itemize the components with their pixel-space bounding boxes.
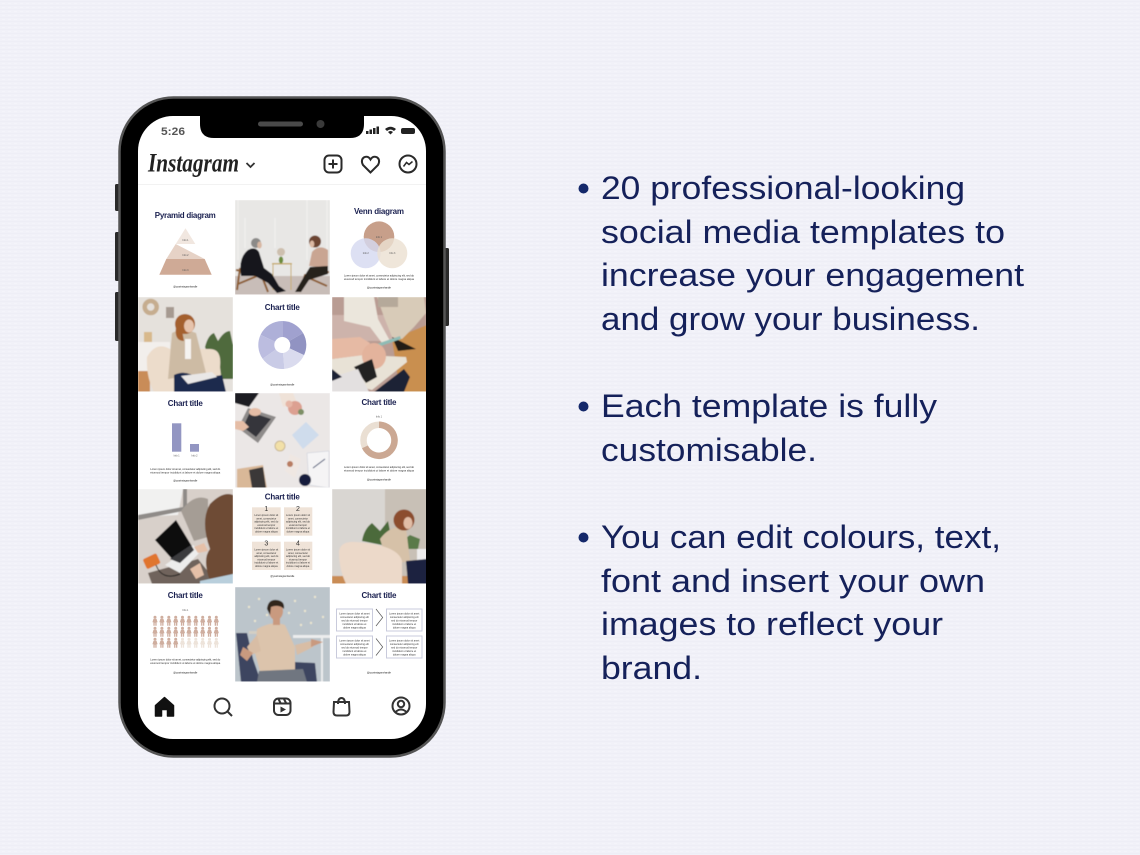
box 4: Lorem ipsum dolor sit (286, 548, 310, 552)
box 1: 1 (264, 506, 268, 513)
bullet 1: increase your engagement (601, 257, 1024, 293)
bullet 1: and grow your business. (601, 301, 980, 337)
handle: @yourinstagramhandle (367, 478, 392, 482)
icon: messenger (400, 156, 416, 172)
box 4: incididunt ut labore et (286, 562, 310, 565)
venn chart (351, 221, 407, 268)
flow row 2: sed do eiusmod tempor (391, 646, 417, 650)
body text: Lorem ipsum dolor sit amet, consectetur adipiscing elit, sed do (150, 658, 221, 662)
flow row 1: consectetur adipiscing elit (340, 616, 369, 619)
handle: @yourinstagramhandle (367, 286, 392, 290)
post: pyramid diagram (155, 211, 216, 288)
side buttons (115, 184, 449, 341)
body text (344, 274, 414, 281)
box 1 (252, 506, 281, 536)
bullet 1: social media templates to (601, 214, 1005, 250)
body text: eiusmod tempor incididunt ut labore et dolore magna aliqua (150, 470, 221, 474)
bullet list (578, 170, 1024, 686)
box 4: eiusmod tempor (289, 558, 307, 561)
label: Info 1 (182, 609, 189, 612)
photo: desk flat lay (235, 393, 330, 488)
post: four numbered boxes (252, 492, 312, 578)
box 1: Lorem ipsum dolor sit (254, 514, 279, 517)
box 3: amet, consectetur (256, 552, 276, 555)
box 3: adipiscing elit, sed do (254, 555, 279, 558)
photo: woman in armchair (332, 489, 427, 584)
flow row 1: incididunt ut labore et (392, 623, 416, 626)
body text: eiusmod tempor incididunt ut labore et dolore magna aliqua (344, 468, 414, 472)
handle: @yourinstagramhandle (367, 670, 392, 674)
body text (150, 467, 221, 474)
box 2: dolore magna aliqua (287, 530, 310, 534)
box 2: 2 (296, 506, 300, 513)
icon: search (214, 698, 232, 716)
photo: woman on laptop (138, 489, 233, 584)
flow row 2: Lorem ipsum dolor sit amet (389, 640, 420, 642)
post: flow boxes (336, 591, 422, 674)
flow row 1: Lorem ipsum dolor sit amet (339, 612, 370, 616)
pyramid chart: Info 1 (183, 239, 189, 242)
box 3: 3 (264, 540, 268, 548)
title: Chart title (265, 492, 300, 502)
flow row 1: consectetur adipiscing elit (390, 616, 419, 619)
handle: @yourinstagramhandle (173, 284, 198, 288)
box 2: amet, consectetur (288, 517, 308, 520)
flow row 1: dolore magna aliqua (343, 626, 366, 630)
flow row 2: Lorem ipsum dolor sit amet (339, 640, 370, 642)
box 4: adipiscing elit, sed do (286, 555, 311, 558)
title: Chart title (362, 398, 397, 407)
dropdown chevron (246, 163, 254, 167)
post: bar chart (150, 399, 221, 482)
photo: two women talking (235, 200, 330, 295)
label: Info 1 (376, 416, 383, 418)
title: Chart title (265, 303, 300, 312)
flow row 1 (336, 609, 422, 631)
flow row 2: incididunt ut labore et (343, 650, 367, 653)
box 4: dolore magna aliqua (287, 565, 310, 568)
instagram wordmark: Instagram (147, 148, 239, 178)
bullet 3: You can edit colours, text, (601, 519, 1001, 555)
box 1: incididunt ut labore et (254, 527, 278, 530)
flow row 2 (336, 636, 422, 658)
photo: writing in notebook (332, 297, 427, 392)
flow row 2: dolore magna aliqua (393, 654, 416, 656)
flow row 1: sed do eiusmod tempor (341, 620, 368, 622)
phone body (120, 98, 444, 756)
box 1: adipiscing elit, sed do (254, 521, 279, 524)
venn chart: Info 1 (376, 236, 383, 239)
title: Chart title (168, 399, 203, 408)
icon: new post (324, 156, 342, 172)
flow row 2: sed do eiusmod tempor (341, 646, 368, 650)
body text: eiusmod tempor incididunt ut labore et dolore magna aliqua (150, 661, 221, 665)
box 2: incididunt ut labore et (286, 527, 310, 530)
bullet 3: font and insert your own (601, 563, 985, 599)
flow row 2: consectetur adipiscing elit (390, 643, 419, 646)
venn chart: Info 2 (363, 252, 369, 255)
phone mockup (115, 98, 449, 756)
box 2: Lorem ipsum dolor sit (286, 514, 310, 517)
phone screen (138, 116, 426, 739)
handle: @yourinstagramhandle (270, 382, 295, 386)
box 3: eiusmod tempor (257, 558, 275, 561)
flow row 2: incididunt ut labore et (392, 650, 416, 653)
photo: woman gesturing (235, 587, 330, 682)
photo: woman with notebook (138, 297, 233, 392)
body text: Lorem ipsum dolor sit amet, consectetur adipiscing elit, sed do (150, 467, 221, 471)
body text (150, 658, 221, 665)
bullet 1: 20 professional-looking (601, 170, 965, 206)
donut chart (364, 425, 394, 456)
box 2: eiusmod tempor (289, 524, 307, 527)
pyramid chart: Info 3 (183, 269, 189, 272)
donut pie chart (258, 321, 306, 369)
box 4: amet, consectetur (288, 552, 308, 555)
post: donut chart (344, 398, 414, 482)
status time: 5:26 (161, 126, 185, 138)
box 3 (252, 540, 281, 570)
notch (200, 116, 364, 138)
post: venn diagram (344, 207, 414, 290)
pyramid chart: Info 2 (183, 254, 189, 257)
box 1: eiusmod tempor (257, 524, 275, 527)
pictogram rows (152, 616, 219, 648)
pyramid chart (159, 228, 212, 275)
bullet 3: images to reflect your (601, 606, 943, 642)
icon: heart (362, 157, 379, 172)
box 2: adipiscing elit, sed do (286, 521, 311, 524)
box 1: dolore magna aliqua (255, 530, 278, 534)
title: Venn diagram (354, 207, 404, 216)
venn chart: Info 3 (389, 252, 396, 255)
body text: eiusmod tempor incididunt ut labore et dolore magna aliqua (344, 277, 414, 281)
handle: @yourinstagramhandle (173, 670, 198, 674)
icon: reels (274, 698, 290, 715)
box 1: amet, consectetur (256, 517, 276, 520)
body text: Lorem ipsum dolor sit amet, consectetur adipiscing elit, sed do (344, 465, 414, 469)
bar chart: Info 1 (174, 454, 180, 458)
bullet 1 (578, 170, 1024, 337)
box 3: incididunt ut labore et (254, 562, 278, 565)
title: Chart title (362, 591, 397, 600)
flow row 1: incididunt ut labore et (343, 623, 367, 626)
flow row 2: consectetur adipiscing elit (340, 643, 369, 646)
bullet 2 (578, 388, 937, 468)
title: Pyramid diagram (155, 211, 216, 220)
bullet 3 (578, 519, 1001, 686)
bar chart (172, 423, 199, 458)
icon: shop bag (334, 698, 350, 716)
box 4: 4 (296, 540, 300, 548)
post: pie chart (258, 303, 306, 386)
flow row 1: dolore magna aliqua (393, 626, 416, 630)
bullet 3: brand. (601, 650, 702, 686)
title: Chart title (168, 591, 203, 600)
bar chart: Info 2 (192, 454, 198, 458)
icon: profile (392, 698, 410, 714)
body text (344, 465, 414, 472)
box 3: dolore magna aliqua (255, 565, 278, 568)
icon: home (156, 698, 174, 716)
bullet 2: customisable. (601, 432, 817, 468)
flow row 1: sed do eiusmod tempor (391, 620, 417, 622)
box 3: Lorem ipsum dolor sit (254, 548, 279, 552)
box 4 (284, 540, 312, 570)
handle: @yourinstagramhandle (270, 574, 295, 578)
status icons (366, 126, 415, 134)
box 2 (284, 506, 312, 536)
flow row 1: Lorem ipsum dolor sit amet (389, 612, 420, 616)
flow row 2: dolore magna aliqua (343, 654, 366, 656)
bullet 2: Each template is fully (601, 388, 937, 424)
post: pictogram chart (150, 591, 221, 674)
handle: @yourinstagramhandle (173, 478, 198, 482)
body text: Lorem ipsum dolor sit amet, consectetur adipiscing elit, sed do (344, 274, 414, 278)
